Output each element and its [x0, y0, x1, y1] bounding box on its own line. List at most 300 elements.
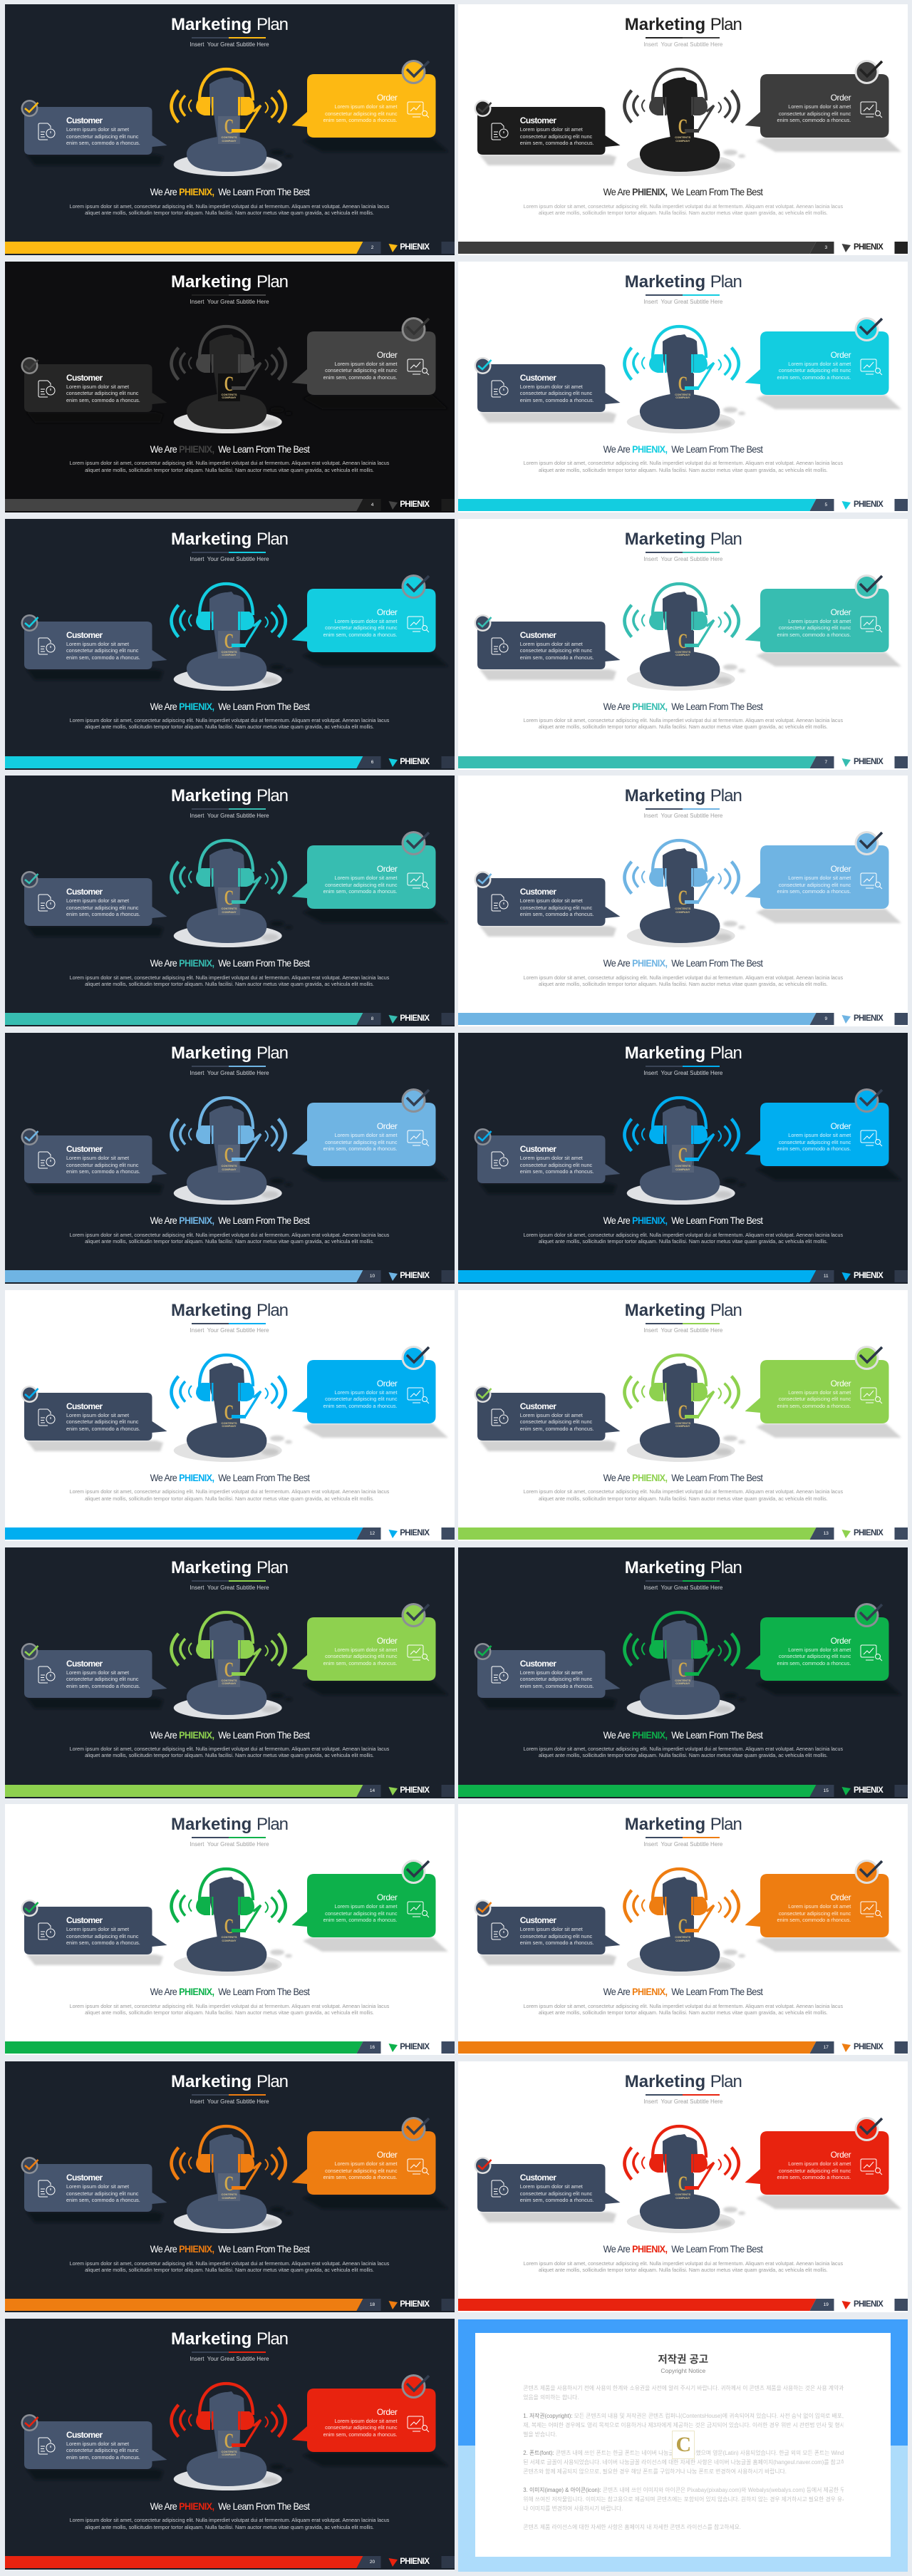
- icon: check badge: [19, 1125, 40, 1147]
- panel: slide 19 white red: [458, 2061, 908, 2312]
- order text: enim sem, commodo a rhoncus.: [323, 1917, 398, 1923]
- customer text: Lorem ipsum dolor sit amet: [66, 1412, 129, 1418]
- customer text: consectetur adipiscing elit nunc: [520, 133, 592, 140]
- body text: aliquet ante mollis, sollicitudin tempor tortor aliquam. Nulla facilisi. Nam auctor metus vitae quam gravida, ac vehicula elit mollis.: [85, 2524, 374, 2530]
- icon: check badge: [855, 60, 884, 84]
- order text: consectetur adipiscing elit nunc: [325, 1139, 398, 1145]
- customer text: Lorem ipsum dolor sit amet: [66, 1155, 129, 1161]
- customer heading: Customer: [520, 1144, 556, 1154]
- panel: slide 18 dark orange: [4, 2061, 455, 2312]
- customer text: [66, 126, 140, 146]
- order text: enim sem, commodo a rhoncus.: [323, 1403, 398, 1409]
- icon: document: [37, 893, 56, 912]
- order heading: Order: [377, 607, 398, 617]
- body text: Lorem ipsum dolor sit amet, consectetur adipiscing elit. Nulla imperdiet volutpat dui at fermentum. Aliquam erat volutpat. Aenean lacinia lacus: [70, 460, 389, 466]
- order text: Lorem ipsum dolor sit amet: [334, 1647, 398, 1652]
- panel: slide 4 black grayscale: [4, 262, 455, 512]
- illustration: agent with headset: CONTENTS: [675, 2193, 690, 2196]
- customer text: Lorem ipsum dolor sit amet: [66, 1669, 129, 1675]
- callout: order: [742, 2113, 904, 2212]
- illustration: agent with headset: C: [678, 1658, 688, 1681]
- icon: check badge: [19, 612, 40, 633]
- customer text: [520, 897, 594, 918]
- order text: Lorem ipsum dolor sit amet: [334, 2160, 398, 2167]
- order text: Lorem ipsum dolor sit amet: [334, 2418, 398, 2424]
- illustration: agent with headset: C: [224, 886, 234, 910]
- tagline: We Are PHIENIX, We Learn From The Best: [603, 186, 763, 197]
- callout: customer: [21, 357, 167, 420]
- order text: consectetur adipiscing elit nunc: [325, 882, 398, 888]
- customer heading: Customer: [66, 1144, 102, 1154]
- icon: monitor chart: [408, 101, 429, 118]
- body text: [458, 1232, 908, 1246]
- tagline: We Are PHIENIX, We Learn From The Best: [150, 1986, 309, 1997]
- footer: [4, 1013, 455, 1025]
- icon: document: [37, 2179, 56, 2198]
- customer text: consectetur adipiscing elit nunc: [520, 1676, 592, 1682]
- order text: consectetur adipiscing elit nunc: [325, 1910, 398, 1917]
- order heading: Order: [831, 1121, 851, 1131]
- callout: customer: [19, 607, 170, 683]
- title: Marketing Plan: [625, 2072, 742, 2091]
- customer text: consectetur adipiscing elit nunc: [66, 1418, 138, 1425]
- customer text: [520, 1155, 594, 1175]
- customer text: Lorem ipsum dolor sit amet: [520, 126, 583, 133]
- footer: [458, 1527, 908, 1540]
- order text: enim sem, commodo a rhoncus.: [323, 2431, 398, 2438]
- body text: Lorem ipsum dolor sit amet, consectetur adipiscing elit. Nulla imperdiet volutpat dui at fermentum. Aliquam erat volutpat. Aenean lacinia lacus: [523, 1232, 843, 1237]
- title underline: [192, 1323, 266, 1324]
- footer: PHIENIX: [400, 1014, 429, 1023]
- illustration: agent with headset: CONTENTS: [675, 1935, 690, 1939]
- illustration: agent with headset: COMPANY: [675, 910, 690, 914]
- footer: PHIENIX: [854, 757, 883, 766]
- customer text: Lorem ipsum dolor sit amet: [520, 2183, 583, 2190]
- tagline: We Are PHIENIX, We Learn From The Best: [603, 1986, 763, 1997]
- icon: check badge: [854, 1087, 884, 1114]
- icon: monitor chart: [859, 357, 882, 377]
- panel: slide 15 dark green: [458, 1547, 908, 1798]
- illustration: agent with headset: [170, 67, 292, 176]
- body text: aliquet ante mollis, sollicitudin tempor tortor aliquam. Nulla facilisi. Nam auctor metus vitae quam gravida, ac vehicula elit mollis.: [539, 723, 828, 730]
- icon: document: [490, 1922, 509, 1940]
- order heading: Order: [831, 607, 851, 617]
- illustration: agent with headset: CONTENTS: [221, 393, 237, 396]
- illustration: agent with headset: COMPANY: [222, 653, 237, 656]
- title: Marketing Plan: [625, 272, 742, 292]
- callout: customer: [472, 2150, 623, 2225]
- body text: aliquet ante mollis, sollicitudin tempor tortor aliquam. Nulla facilisi. Nam auctor metus vitae quam gravida, ac vehicula elit mollis.: [85, 2267, 374, 2273]
- footer: [4, 1785, 455, 1796]
- order text: enim sem, commodo a rhoncus.: [777, 1660, 851, 1666]
- footer: PHIENIX: [400, 1272, 429, 1280]
- customer text: enim sem, commodo a rhoncus.: [66, 1426, 140, 1432]
- panel: copyright notice: [458, 2319, 908, 2572]
- customer text: consectetur adipiscing elit nunc: [66, 905, 138, 911]
- footer: [4, 2299, 455, 2311]
- panel: slide 12 white blue: [4, 1290, 455, 1541]
- illustration: agent with headset: CONTENTS: [675, 135, 690, 139]
- callout: order: [742, 827, 904, 927]
- icon: check badge: [21, 357, 38, 374]
- title: Marketing Plan: [171, 272, 288, 292]
- order text: enim sem, commodo a rhoncus.: [323, 1145, 398, 1152]
- customer heading: Customer: [66, 1915, 102, 1925]
- panel: slide 11 dark blue: [458, 1033, 908, 1284]
- order text: consectetur adipiscing elit nunc: [325, 2168, 398, 2174]
- customer text: [520, 1669, 594, 1689]
- illustration: agent with headset: C: [678, 372, 688, 396]
- footer: 18: [370, 2302, 375, 2307]
- icon: check badge: [472, 1383, 494, 1404]
- customer text: Lorem ipsum dolor sit amet: [66, 126, 129, 133]
- illustration: agent with headset: CONTENTS: [675, 1678, 690, 1682]
- body text: Lorem ipsum dolor sit amet, consectetur adipiscing elit. Nulla imperdiet volutpat dui at fermentum. Aliquam erat volutpat. Aenean lacinia lacus: [70, 1746, 389, 1752]
- icon: monitor chart: [406, 1128, 429, 1148]
- illustration: agent with headset: [162, 836, 295, 950]
- footer: PHIENIX: [400, 500, 429, 509]
- tagline: We Are PHIENIX, We Learn From The Best: [603, 1472, 763, 1483]
- illustration: agent with headset: [616, 1351, 748, 1465]
- order text: Lorem ipsum dolor sit amet: [788, 1647, 851, 1652]
- footer: [458, 2299, 908, 2311]
- title: Marketing Plan: [171, 2072, 288, 2091]
- illustration: agent with headset: CONTENTS: [221, 907, 237, 910]
- illustration: agent with headset: C: [224, 1401, 234, 1424]
- icon: document: [490, 636, 509, 654]
- body text: aliquet ante mollis, sollicitudin tempor tortor aliquam. Nulla facilisi. Nam auctor metus vitae quam gravida, ac vehicula elit mollis.: [539, 467, 828, 473]
- icon: check badge: [400, 1858, 430, 1885]
- footer: [458, 756, 908, 768]
- customer heading: Customer: [66, 373, 102, 383]
- illustration: agent with headset: C: [678, 115, 688, 138]
- illustration: agent with headset: C: [678, 1401, 688, 1424]
- body text: Lorem ipsum dolor sit amet, consectetur adipiscing elit. Nulla imperdiet volutpat dui at fermentum. Aliquam erat volutpat. Aenean lacinia lacus: [70, 974, 389, 981]
- customer text: [66, 1926, 140, 1947]
- illustration: agent with headset: COMPANY: [222, 2196, 237, 2200]
- order text: Lorem ipsum dolor sit amet: [788, 2160, 851, 2167]
- body text: [4, 2260, 455, 2274]
- footer: [4, 2041, 455, 2054]
- footer: PHIENIX: [854, 2043, 883, 2051]
- illustration: agent with headset: COMPANY: [222, 910, 237, 914]
- order text: consectetur adipiscing elit nunc: [325, 1653, 398, 1659]
- icon: monitor chart: [406, 1900, 429, 1920]
- notice logo: C: C: [675, 2433, 691, 2456]
- body text: [4, 1488, 455, 1503]
- order text: enim sem, commodo a rhoncus.: [777, 1145, 851, 1152]
- illustration: agent with headset: [162, 1093, 295, 1207]
- icon: check badge: [19, 2154, 40, 2175]
- order heading: Order: [377, 93, 398, 103]
- tagline: We Are PHIENIX, We Learn From The Best: [150, 1472, 309, 1483]
- order text: [777, 2160, 851, 2181]
- order text: consectetur adipiscing elit nunc: [779, 2168, 851, 2174]
- icon: monitor chart: [406, 2414, 429, 2434]
- subtitle: Insert Your Great Subtitle Here: [190, 1841, 269, 1848]
- footer: 3: [824, 245, 827, 250]
- illustration: agent with headset: [616, 1865, 748, 1979]
- order text: Lorem ipsum dolor sit amet: [788, 617, 851, 624]
- order text: enim sem, commodo a rhoncus.: [777, 2174, 851, 2180]
- callout: order: [288, 1341, 450, 1441]
- order text: [777, 103, 851, 123]
- icon: check badge: [402, 317, 430, 341]
- callout: customer: [472, 351, 623, 426]
- notice body text: 나 이미지를 변경하여 사용하시기 바랍니다.: [523, 2505, 623, 2512]
- title: Marketing Plan: [625, 1558, 742, 1577]
- body text: [4, 2517, 455, 2531]
- icon: check badge: [854, 2116, 884, 2143]
- illustration: agent with headset: C: [224, 2172, 234, 2195]
- order text: enim sem, commodo a rhoncus.: [777, 1403, 851, 1409]
- subtitle: Insert Your Great Subtitle Here: [190, 299, 269, 305]
- icon: check badge: [19, 1639, 40, 1661]
- order text: [323, 361, 398, 381]
- icon: check badge: [472, 868, 494, 890]
- illustration: agent with headset: [616, 836, 748, 950]
- order text: consectetur adipiscing elit nunc: [779, 1910, 851, 1917]
- footer: PHIENIX: [400, 243, 429, 252]
- customer text: [66, 1669, 140, 1689]
- order text: [323, 617, 398, 638]
- footer: 4: [371, 503, 373, 508]
- customer text: [520, 1412, 594, 1433]
- customer heading: Customer: [66, 1401, 102, 1411]
- customer heading: Customer: [520, 1915, 556, 1925]
- body text: aliquet ante mollis, sollicitudin tempor tortor aliquam. Nulla facilisi. Nam auctor metus vitae quam gravida, ac vehicula elit mollis.: [539, 981, 828, 987]
- illustration: agent with headset: C: [224, 629, 234, 653]
- body text: aliquet ante mollis, sollicitudin tempor tortor aliquam. Nulla facilisi. Nam auctor metus vitae quam gravida, ac vehicula elit mollis.: [539, 2267, 828, 2273]
- panel: slide 2 dark yellow: [4, 4, 455, 255]
- footer: [458, 242, 908, 254]
- order heading: Order: [377, 1379, 398, 1389]
- body text: aliquet ante mollis, sollicitudin tempor tortor aliquam. Nulla facilisi. Nam auctor metus vitae quam gravida, ac vehicula elit mollis.: [85, 1752, 374, 1758]
- customer heading: Customer: [520, 1658, 556, 1668]
- icon: check badge: [472, 1125, 494, 1147]
- callout: customer: [472, 1637, 623, 1711]
- notice title: 저작권 공고: [658, 2354, 708, 2366]
- callout: order: [288, 570, 450, 670]
- body text: aliquet ante mollis, sollicitudin tempor tortor aliquam. Nulla facilisi. Nam auctor metus vitae quam gravida, ac vehicula elit mollis.: [85, 1238, 374, 1245]
- body text: aliquet ante mollis, sollicitudin tempor tortor aliquam. Nulla facilisi. Nam auctor metus vitae quam gravida, ac vehicula elit mollis.: [85, 210, 374, 216]
- order text: consectetur adipiscing elit nunc: [779, 110, 851, 117]
- footer: 14: [370, 1788, 375, 1793]
- customer text: enim sem, commodo a rhoncus.: [520, 911, 594, 917]
- illustration: agent with headset: CONTENTS: [221, 2450, 237, 2453]
- illustration: agent with headset: CONTENTS: [675, 1164, 690, 1168]
- panel: slide 14 dark light green: [4, 1547, 455, 1798]
- order heading: Order: [831, 2150, 851, 2160]
- footer: [458, 499, 908, 511]
- order heading: Order: [377, 1121, 398, 1131]
- callout: order: [292, 60, 447, 153]
- footer: [4, 756, 455, 768]
- body text: [4, 1232, 455, 1246]
- callout: order: [288, 1084, 450, 1184]
- footer: PHIENIX: [854, 243, 883, 252]
- callout: order: [288, 827, 450, 927]
- body text: Lorem ipsum dolor sit amet, consectetur adipiscing elit. Nulla imperdiet volutpat dui at fermentum. Aliquam erat volutpat. Aenean lacinia lacus: [523, 974, 843, 981]
- customer heading: Customer: [520, 115, 556, 125]
- customer text: consectetur adipiscing elit nunc: [66, 390, 138, 396]
- order text: [777, 1903, 851, 1924]
- order heading: Order: [377, 1635, 398, 1645]
- body text: Lorem ipsum dolor sit amet, consectetur adipiscing elit. Nulla imperdiet volutpat dui at fermentum. Aliquam erat volutpat. Aenean lacinia lacus: [523, 2003, 843, 2009]
- icon: monitor chart: [861, 101, 882, 118]
- customer text: enim sem, commodo a rhoncus.: [520, 654, 594, 661]
- customer text: consectetur adipiscing elit nunc: [66, 1162, 138, 1168]
- icon: document: [37, 1408, 56, 1426]
- panel: slide 13 white light green: [458, 1290, 908, 1541]
- customer text: [66, 1155, 140, 1175]
- illustration: agent with headset: COMPANY: [222, 1168, 237, 1171]
- footer: PHIENIX: [400, 757, 429, 766]
- order heading: Order: [377, 864, 398, 874]
- customer text: Lorem ipsum dolor sit amet: [520, 640, 583, 647]
- customer text: [520, 2183, 594, 2204]
- illustration: agent with headset: [616, 579, 748, 693]
- order text: [323, 2418, 398, 2438]
- illustration: agent with headset: C: [224, 115, 234, 138]
- icon: check badge: [475, 100, 492, 117]
- footer: 20: [370, 2560, 375, 2565]
- illustration: agent with headset: COMPANY: [222, 1424, 237, 1428]
- footer: PHIENIX: [854, 1272, 883, 1280]
- customer text: Lorem ipsum dolor sit amet: [520, 1155, 583, 1161]
- illustration: agent with headset: COMPANY: [675, 1681, 690, 1685]
- order text: [323, 875, 398, 895]
- callout: customer: [472, 1122, 623, 1197]
- callout: order: [288, 2113, 450, 2212]
- footer: [458, 1270, 908, 1282]
- callout: customer: [472, 865, 623, 939]
- body text: Lorem ipsum dolor sit amet, consectetur adipiscing elit. Nulla imperdiet volutpat dui at fermentum. Aliquam erat volutpat. Aenean lacinia lacus: [70, 717, 389, 723]
- order text: [777, 1389, 851, 1410]
- body text: [70, 460, 389, 473]
- tagline: We Are PHIENIX, We Learn From The Best: [150, 1215, 309, 1226]
- footer: [4, 2556, 455, 2568]
- order heading: Order: [377, 2407, 398, 2417]
- subtitle: Insert Your Great Subtitle Here: [643, 1327, 722, 1334]
- customer text: enim sem, commodo a rhoncus.: [66, 654, 140, 661]
- customer text: Lorem ipsum dolor sit amet: [520, 897, 583, 904]
- icon: check badge: [472, 1639, 494, 1661]
- footer: PHIENIX: [400, 1529, 429, 1537]
- title underline: [646, 1837, 720, 1838]
- title underline: [646, 1580, 720, 1581]
- order text: Lorem ipsum dolor sit amet: [334, 361, 398, 367]
- illustration: agent with headset: COMPANY: [222, 396, 237, 399]
- customer heading: Customer: [520, 373, 556, 383]
- callout: customer: [472, 1893, 623, 1968]
- order text: Lorem ipsum dolor sit amet: [334, 875, 398, 881]
- tagline: We Are PHIENIX, We Learn From The Best: [603, 443, 763, 455]
- order text: consectetur adipiscing elit nunc: [779, 1139, 851, 1145]
- order text: [777, 361, 851, 381]
- icon: monitor chart: [406, 2157, 429, 2177]
- tagline: We Are PHIENIX, We Learn From The Best: [150, 957, 309, 969]
- footer: PHIENIX: [854, 1786, 883, 1795]
- icon: document: [490, 1408, 509, 1426]
- customer text: Lorem ipsum dolor sit amet: [520, 1412, 583, 1418]
- body text: Lorem ipsum dolor sit amet, consectetur adipiscing elit. Nulla imperdiet volutpat dui at fermentum. Aliquam erat volutpat. Aenean lacinia lacus: [70, 1232, 389, 1237]
- subtitle: Insert Your Great Subtitle Here: [190, 556, 269, 562]
- icon: document: [37, 1665, 56, 1684]
- customer text: consectetur adipiscing elit nunc: [66, 1933, 138, 1939]
- order heading: Order: [831, 1892, 851, 1902]
- title underline: [646, 294, 720, 296]
- order text: enim sem, commodo a rhoncus.: [777, 374, 851, 381]
- icon: monitor chart: [859, 1900, 882, 1920]
- order text: consectetur adipiscing elit nunc: [325, 624, 398, 631]
- icon: check badge: [854, 316, 884, 343]
- illustration: agent with headset: CONTENTS: [675, 650, 690, 653]
- tagline: We Are PHIENIX, We Learn From The Best: [603, 957, 763, 969]
- icon: check badge: [400, 573, 430, 600]
- body text: aliquet ante mollis, sollicitudin tempor tortor aliquam. Nulla facilisi. Nam auctor metus vitae quam gravida, ac vehicula elit mollis.: [539, 1238, 828, 1245]
- footer: 5: [824, 503, 827, 508]
- illustration: agent with headset: C: [678, 1915, 688, 1938]
- order text: [777, 875, 851, 895]
- customer text: enim sem, commodo a rhoncus.: [66, 1168, 140, 1175]
- body text: Lorem ipsum dolor sit amet, consectetur adipiscing elit. Nulla imperdiet volutpat dui at fermentum. Aliquam erat volutpat. Aenean lacinia lacus: [523, 460, 843, 466]
- icon: monitor chart: [408, 359, 429, 375]
- illustration: agent with headset: COMPANY: [222, 1681, 237, 1685]
- icon: monitor chart: [859, 614, 882, 634]
- footer: PHIENIX: [854, 2300, 883, 2309]
- title underline: [192, 1837, 266, 1838]
- panel: slide 10 dark sky blue: [4, 1033, 455, 1284]
- illustration: agent with headset: [623, 67, 745, 176]
- tagline: We Are PHIENIX, We Learn From The Best: [150, 2500, 309, 2512]
- callout: order: [742, 1084, 904, 1184]
- illustration: agent with headset: [162, 579, 295, 693]
- icon: check badge: [854, 573, 884, 600]
- order text: consectetur adipiscing elit nunc: [325, 110, 398, 117]
- customer text: consectetur adipiscing elit nunc: [520, 390, 592, 396]
- illustration: agent with headset: CONTENTS: [675, 907, 690, 910]
- illustration: agent with headset: COMPANY: [222, 139, 237, 143]
- customer heading: Customer: [520, 1401, 556, 1411]
- illustration: agent with headset: CONTENTS: [221, 1935, 237, 1939]
- illustration: agent with headset: C: [678, 2172, 688, 2195]
- callout: order: [288, 1855, 450, 1955]
- icon: check badge: [472, 354, 494, 376]
- subtitle: Insert Your Great Subtitle Here: [190, 2098, 269, 2105]
- footer: 16: [370, 2045, 375, 2050]
- icon: check badge: [21, 100, 38, 117]
- title underline: [192, 2351, 266, 2353]
- order heading: Order: [831, 1379, 851, 1389]
- icon: check badge: [854, 830, 884, 857]
- order text: Lorem ipsum dolor sit amet: [788, 1389, 851, 1396]
- notice body text: 벌을 받습니다.: [523, 2431, 557, 2438]
- customer heading: Customer: [66, 2430, 102, 2440]
- footer: [458, 1013, 908, 1025]
- callout: customer: [19, 1122, 170, 1197]
- body text: aliquet ante mollis, sollicitudin tempor tortor aliquam. Nulla facilisi. Nam auctor metus vitae quam gravida, ac vehicula elit mollis.: [539, 1752, 828, 1758]
- title underline: [646, 808, 720, 810]
- footer: [4, 1270, 455, 1282]
- order text: enim sem, commodo a rhoncus.: [323, 888, 398, 895]
- illustration: agent with headset: COMPANY: [675, 139, 690, 143]
- icon: document: [38, 381, 56, 398]
- icon: check badge: [400, 830, 430, 857]
- footer: 9: [824, 1016, 827, 1021]
- customer text: consectetur adipiscing elit nunc: [66, 1676, 138, 1682]
- subtitle: Insert Your Great Subtitle Here: [643, 1070, 722, 1076]
